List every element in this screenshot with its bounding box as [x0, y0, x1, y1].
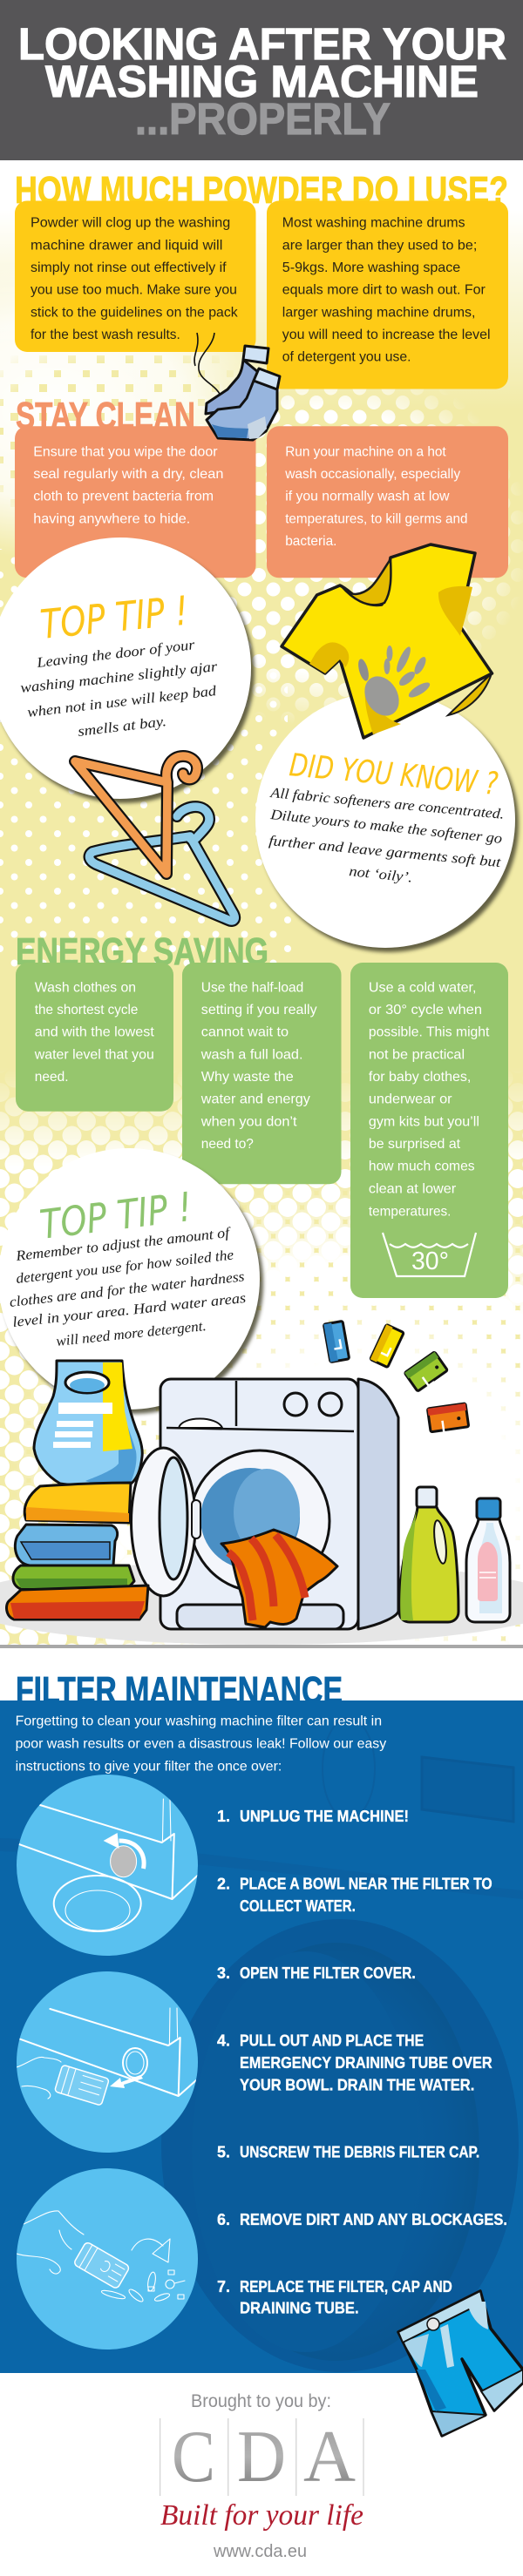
list: filter steps: REPLACE THE FILTER, CAP AND — [240, 2278, 452, 2295]
title banner — [0, 0, 523, 160]
panel: powder left — [15, 200, 256, 352]
panel: energy saving 3: Use a cold water, — [369, 980, 476, 995]
panel: energy saving 2: need to? — [201, 1137, 254, 1152]
panel: stay clean left: cloth to prevent bacteria from — [33, 490, 214, 504]
list: filter steps: COLLECT WATER. — [240, 1897, 356, 1915]
title banner: ...PROPERLY — [135, 94, 391, 144]
callout: top tip door: smells at bay. — [77, 713, 167, 740]
list: filter steps: UNPLUG THE MACHINE! — [240, 1808, 409, 1825]
icon: 30 degree wash symbol: 30° — [411, 1247, 449, 1275]
callout: top tip detergent — [0, 1148, 263, 1414]
icon: blue clothes hanger — [90, 807, 234, 921]
logo: CDA: C — [172, 2416, 215, 2498]
panel: powder right: are larger than they used to be; — [282, 238, 477, 253]
list: filter steps: YOUR BOWL. DRAIN THE WATER. — [240, 2077, 474, 2094]
text: filter intro — [16, 1714, 386, 1774]
panel: energy saving 2: Use the half-load — [201, 980, 303, 995]
panel: stay clean right — [267, 426, 508, 578]
panel: powder left: you use too much. Make sure you — [31, 283, 237, 298]
panel: stay clean left: Ensure that you wipe the door — [33, 444, 218, 459]
tagline: Built for your life — [160, 2499, 363, 2532]
callout: top tip detergent: will need more detergent. — [55, 1317, 207, 1349]
icon: 30 degree wash symbol — [383, 1233, 476, 1276]
panel: energy saving 2: when you don’t — [200, 1114, 297, 1129]
panel: energy saving 3: underwear or — [369, 1092, 452, 1107]
list: filter steps: PLACE A BOWL NEAR THE FILTER TO — [240, 1875, 492, 1892]
icon: clothes pegs — [323, 1321, 469, 1435]
divider line — [0, 1645, 523, 1648]
icon: smelly socks — [194, 333, 280, 440]
callout: top tip door: TOP TIP ! — [38, 587, 190, 648]
panel: energy saving 3: not be practical — [369, 1047, 465, 1062]
panel: powder right: 5-9kgs. More washing space — [282, 260, 460, 275]
panel: energy saving 2: water and energy — [200, 1092, 310, 1107]
icon: washing machine — [160, 1379, 398, 1629]
panel: powder left: Powder will clog up the washing — [31, 216, 230, 231]
panel: energy saving 3: gym kits but you’ll — [369, 1114, 479, 1129]
panel: powder right: Most washing machine drums — [282, 216, 465, 231]
panel: energy saving 1: water level that you — [34, 1047, 154, 1062]
list: filter steps: 1. — [217, 1808, 230, 1825]
list: filter steps: UNSCREW THE DEBRIS FILTER CAP. — [240, 2144, 479, 2161]
callout: did you know: Dilute yours to make the softener go — [268, 806, 503, 847]
panel: energy saving 1: need. — [35, 1070, 68, 1085]
panel: energy saving 2: cannot wait to — [201, 1025, 289, 1040]
panel: filter maintenance background — [0, 1700, 523, 2373]
callout: top tip detergent: level in your area. Hard water areas — [11, 1289, 247, 1330]
list: filter steps: DRAINING TUBE. — [240, 2300, 359, 2317]
icon: orange clothes hanger — [75, 756, 197, 874]
list: filter steps: EMERGENCY DRAINING TUBE OVER — [240, 2054, 492, 2072]
panel: energy saving 2: Why waste the — [201, 1070, 294, 1085]
callout: did you know: further and leave garments soft but — [268, 832, 502, 870]
panel: energy saving 2: wash a full load. — [200, 1047, 303, 1062]
yellow halftone background — [0, 160, 523, 1646]
text: filter intro: instructions to give your filter the once over: — [16, 1759, 282, 1774]
list: filter steps: PULL OUT AND PLACE THE — [240, 2032, 424, 2049]
callout: top tip detergent: Remember to adjust the amount of — [14, 1224, 233, 1264]
callout: top tip door — [0, 538, 255, 803]
heading: energy saving: ENERGY SAVING — [16, 930, 268, 973]
diagram: unplug and bowl — [17, 1775, 198, 1956]
text: filter intro: poor wash results or even a disastrous leak! Follow our easy — [16, 1737, 386, 1752]
panel: energy saving 3: be surprised at — [369, 1137, 461, 1152]
icon: white softener bottle — [466, 1498, 510, 1622]
panel: powder right: equals more dirt to wash out. For — [282, 283, 486, 298]
callout: did you know: not ‘oily’. — [349, 862, 413, 886]
panel: powder left: machine drawer and liquid will — [31, 238, 222, 253]
logo: CDA: D — [237, 2416, 286, 2498]
floor shadow — [0, 1561, 523, 1645]
panel: powder right: larger washing machine drums, — [282, 305, 475, 320]
panel: energy saving 3: how much comes — [369, 1160, 475, 1174]
title banner: LOOKING AFTER YOUR — [18, 19, 506, 69]
list: filter steps: 4. — [217, 2032, 230, 2049]
panel: powder right — [267, 200, 508, 389]
callout: top tip detergent: clothes are and for the water hardness — [9, 1268, 245, 1310]
list: filter steps — [217, 1808, 507, 2317]
list: filter steps: 3. — [217, 1964, 230, 1982]
diagram: pull out filter — [17, 1971, 198, 2153]
panel: energy saving 1: and with the lowest — [35, 1025, 154, 1040]
callout: did you know — [255, 692, 519, 952]
icon: denim shorts — [398, 2291, 523, 2436]
footer: website: www.cda.eu — [213, 2542, 307, 2561]
panel: powder left: for the best wash results. — [31, 328, 180, 342]
footer: brought to you by: Brought to you by: — [191, 2391, 331, 2411]
icon: green detergent bottle — [399, 1487, 458, 1622]
logo: CDA: A — [303, 2416, 356, 2498]
diagram: clean debris — [17, 2168, 198, 2350]
panel: stay clean left: seal regularly with a dry, clean — [33, 467, 223, 482]
icon: stained yellow t-shirt — [282, 544, 492, 738]
list: filter steps: 2. — [217, 1875, 230, 1892]
panel: energy saving 3: or 30° cycle when — [369, 1003, 482, 1018]
icon: powder bag — [34, 1361, 142, 1485]
heading: filter maintenance: FILTER MAINTENANCE — [16, 1669, 343, 1712]
list: filter steps: 6. — [217, 2211, 230, 2228]
panel: stay clean right: wash occasionally, especially — [284, 467, 460, 482]
list: filter steps: 7. — [217, 2278, 230, 2295]
panel: stay clean right: bacteria. — [285, 534, 336, 549]
icon: orange towel — [221, 1530, 337, 1627]
panel: stay clean left — [15, 426, 256, 578]
panel: stay clean right: Run your machine on a hot — [285, 444, 446, 459]
panel: energy saving 3: temperatures. — [369, 1204, 451, 1220]
list: filter steps: 5. — [217, 2144, 230, 2161]
list: filter steps: OPEN THE FILTER COVER. — [240, 1964, 416, 1982]
callout: top tip door: Leaving the door of your — [35, 636, 196, 671]
panel: powder left: stick to the guidelines on the pack — [31, 305, 239, 320]
panel: powder right: you will need to increase the level — [282, 328, 491, 342]
heading: stay clean: STAY CLEAN — [16, 395, 195, 437]
icon: open washing machine door — [131, 1448, 200, 1596]
panel: stay clean right: temperatures, to kill germs and — [285, 511, 467, 526]
panel: energy saving 1 — [16, 963, 173, 1112]
panel: energy saving 1: the shortest cycle — [35, 1003, 138, 1018]
icon: stack of folded towels — [7, 1483, 148, 1619]
panel: stay clean right: if you normally wash at low — [285, 490, 450, 504]
callout: did you know: All fabric softeners are concentrated. — [269, 784, 505, 822]
panel: energy saving 3: for baby clothes, — [369, 1070, 471, 1085]
callout: top tip detergent: TOP TIP ! — [37, 1183, 194, 1248]
panel: energy saving 3: possible. This might — [369, 1025, 490, 1040]
title banner: WASHING MACHINE — [45, 57, 479, 106]
callout: top tip detergent: detergent you use for how soiled the — [15, 1247, 234, 1287]
panel: energy saving 3: clean at lower — [369, 1181, 457, 1196]
panel: stay clean left: having anywhere to hide. — [33, 511, 190, 526]
callout: top tip door: when not in use will keep bad — [26, 682, 218, 720]
panel: energy saving 1: Wash clothes on — [35, 980, 136, 995]
logo: CDA — [160, 2416, 363, 2498]
callout: top tip door: washing machine slightly ajar — [19, 658, 219, 696]
panel: energy saving 2 — [182, 963, 342, 1184]
text: filter intro: Forgetting to clean your washing machine filter can result in — [16, 1714, 382, 1729]
panel: powder right: of detergent you use. — [282, 350, 411, 365]
panel: energy saving 2: setting if you really — [201, 1003, 317, 1018]
panel: powder left: simply not rinse out effectively if — [31, 260, 227, 275]
panel: energy saving 3 — [350, 963, 508, 1298]
